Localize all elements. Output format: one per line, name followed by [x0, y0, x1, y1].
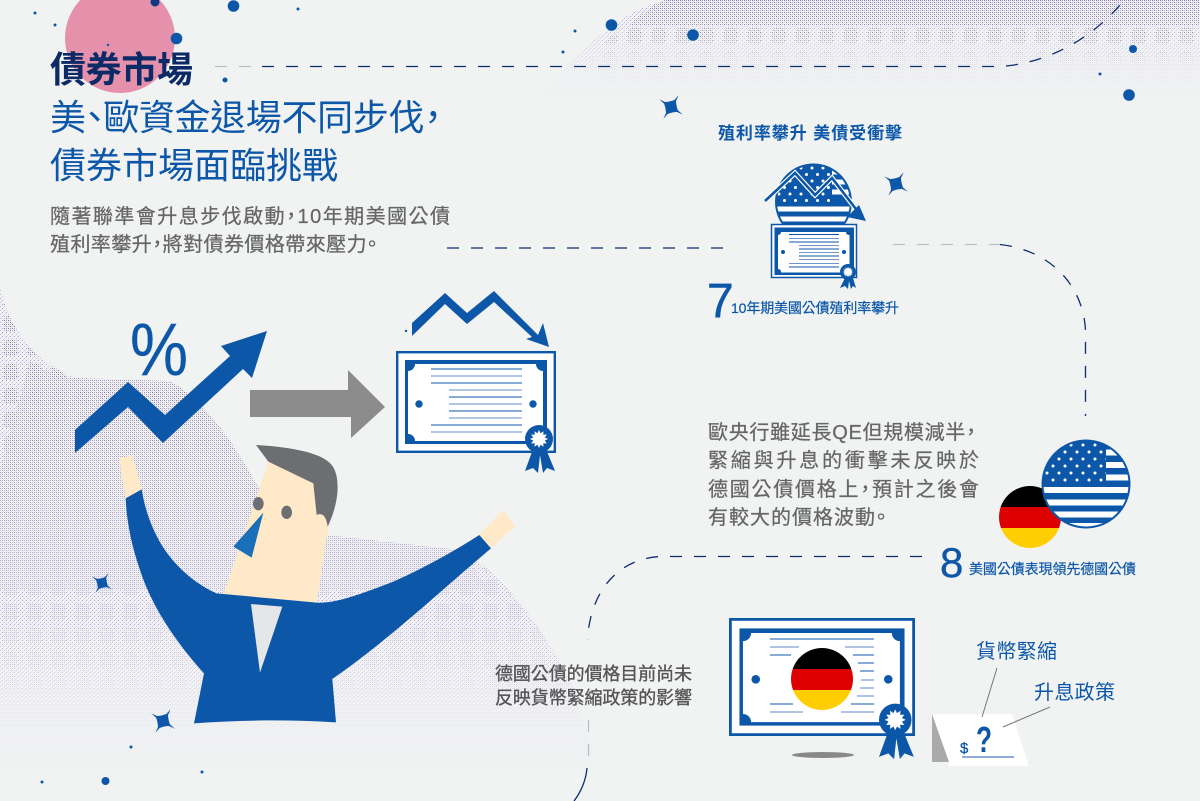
bond certificate [397, 352, 555, 473]
illustration: businessman [119, 445, 515, 723]
percent sign: % [130, 308, 188, 391]
dashed connectors [215, 5, 1120, 801]
right hand [479, 510, 515, 548]
labels with leader lines: 升息政策 [1034, 681, 1115, 704]
nose [233, 513, 263, 558]
small certificate [772, 224, 856, 289]
labels with leader lines: 貨幣緊縮 [976, 640, 1057, 663]
small falling arrow [765, 173, 866, 221]
item 7: 10年期美國公債殖利率攀升 [731, 300, 899, 316]
item 8: 美國公債表現領先德國公債 [969, 561, 1136, 577]
hair [256, 445, 338, 527]
labels with leader lines [976, 640, 1115, 727]
ECB paragraph [708, 421, 979, 529]
subtitle [50, 97, 442, 186]
ECB paragraph: 德國公債價格上，預計之後會 [708, 478, 979, 501]
falling arrow [412, 291, 549, 347]
intro paragraph: 殖利率攀升，將對債券價格帶來壓力。 [50, 233, 377, 256]
item 7 [707, 275, 899, 328]
item 8 [940, 539, 1136, 586]
ECB paragraph: 緊縮與升息的衝擊未反映於 [708, 449, 979, 472]
suit [126, 489, 491, 723]
price card: $ [960, 740, 969, 757]
item 8: 8 [940, 539, 963, 586]
price card [932, 714, 1029, 766]
caption: German bonds: 德國公債的價格目前尚未 [495, 664, 692, 684]
shirt [251, 604, 282, 673]
subtitle: 債券市場面臨挑戰 [50, 145, 338, 186]
intro paragraph: 隨著聯準會升息步伐啟動，10年期美國公債 [50, 205, 450, 228]
large bond with German flag [730, 619, 914, 759]
title: 債券市場 [50, 49, 193, 90]
pink circle [65, 0, 175, 93]
halftone blob: left [0, 285, 600, 780]
eyes [253, 497, 264, 510]
icon: US flag [1042, 440, 1130, 528]
section heading: US yields: 殖利率攀升 美債受衝擊 [718, 123, 902, 143]
caption: German bonds [495, 664, 692, 708]
caption: German bonds: 反映貨幣緊縮政策的影響 [495, 688, 692, 708]
icon: German flag [999, 486, 1061, 549]
shadow [792, 752, 854, 758]
icon: US flag with arrow over bond [765, 164, 866, 289]
ECB paragraph: 歐央行雖延長QE但規模減半， [708, 421, 976, 444]
item 7: 7 [707, 275, 734, 328]
sparkle icons [86, 88, 915, 740]
halftone blob: top right [542, 0, 1200, 96]
grey arrow [250, 370, 385, 438]
intro paragraph [50, 205, 450, 256]
price card: ? [976, 719, 992, 760]
subtitle: 美、歐資金退場不同步伐， [50, 97, 442, 138]
left hand [119, 456, 142, 498]
ECB paragraph: 有較大的價格波動。 [708, 506, 886, 529]
head [223, 462, 328, 603]
rising arrow [75, 331, 267, 453]
